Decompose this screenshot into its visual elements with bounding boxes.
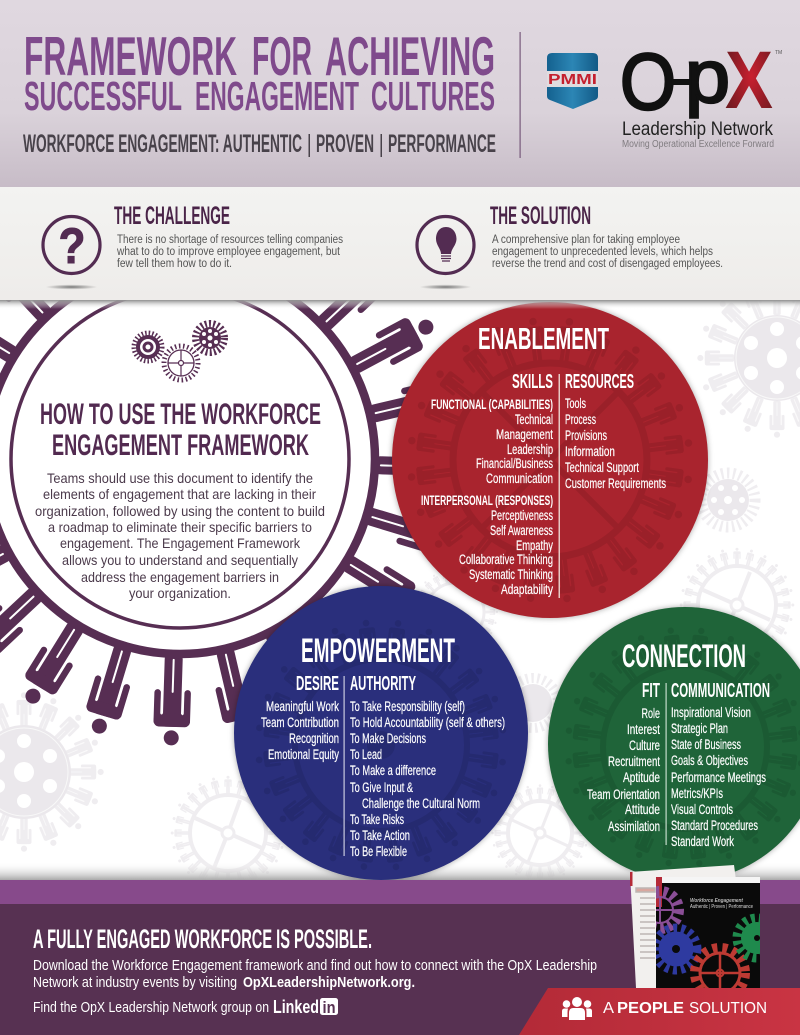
authority list: To Be Flexible: [350, 844, 407, 859]
communication list: State of Business: [671, 737, 741, 752]
panel: the challenge: [43, 202, 343, 290]
column heads: [512, 371, 634, 393]
authority list: To Make a difference: [350, 763, 436, 778]
body text: [116, 234, 343, 270]
column heads: FIT: [642, 680, 660, 702]
call to action text: Download the Workforce Engagement framework and find out how to connect with the OpX Leadership: [33, 957, 597, 974]
subtitle: PROVEN: [316, 130, 374, 158]
booklet image: [630, 865, 760, 988]
watermark gear: [256, 620, 506, 870]
column heads: [642, 680, 770, 702]
skills list: Self Awareness: [490, 523, 553, 538]
body text: engagement. The Engagement Framework: [60, 535, 301, 551]
logo: OpX: X: [725, 35, 773, 126]
green circle: [548, 607, 800, 881]
title: FRAMEWORK: [24, 25, 237, 87]
fit list: Recruitment: [608, 754, 660, 769]
logo: OpX: p: [685, 35, 730, 118]
column heads: RESOURCES: [565, 371, 634, 393]
purple stripe: [0, 880, 800, 904]
logo: OpX: Moving Operational Excellence Forward: [622, 139, 774, 150]
body text: There is no shortage of resources telling companies: [117, 234, 343, 246]
fit list: Interest: [627, 722, 660, 737]
divider: [666, 683, 667, 845]
heading: EMPOWERMENT: [301, 632, 455, 670]
authority list: To Take Risks: [350, 812, 404, 827]
heading: ENGAGEMENT FRAMEWORK: [52, 429, 309, 462]
people ring: [0, 134, 505, 784]
skills list: FUNCTIONAL (CAPABILITIES): [431, 397, 553, 412]
red circle: [392, 302, 708, 618]
body text: [492, 234, 723, 270]
icon: people: [562, 997, 592, 1020]
body text: elements of engagement that are lacking in their: [43, 486, 316, 502]
logo: OpX: [620, 35, 782, 150]
gear: wheel right: [674, 542, 800, 668]
tag text: PEOPLE: [617, 1000, 684, 1017]
title: ACHIEVING: [325, 25, 495, 87]
header divider: [520, 32, 521, 158]
call to action text: [33, 957, 597, 1016]
authority list: To Give Input &: [350, 780, 413, 795]
resources list: Provisions: [565, 428, 607, 443]
call to action text: OpXLeadershipNetwork.org.: [243, 974, 415, 991]
inner ring: [11, 290, 349, 628]
front page: [656, 877, 760, 988]
gear outer ring: [0, 264, 375, 654]
call to action heading: A FULLY ENGAGED WORKFORCE IS POSSIBLE.: [33, 924, 372, 954]
front page: Authentic | Proven | Performance: [690, 904, 753, 910]
column heads: SKILLS: [512, 371, 553, 393]
tag text: SOLUTION: [689, 1000, 767, 1017]
heading: THE SOLUTION: [490, 202, 591, 230]
skills list: Perceptiveness: [491, 508, 553, 523]
panel: enablement: [388, 302, 712, 622]
resources list: Process: [565, 412, 596, 427]
icon: LinkedIn wordmark: in: [322, 998, 336, 1017]
background gears: [0, 275, 800, 896]
call to action text: Network at industry events by visiting: [33, 974, 237, 991]
logo: PMMI shield: PMMI: [548, 71, 597, 88]
watermark gear: [566, 628, 800, 866]
gear: top right: [694, 275, 800, 441]
communication list: Visual Controls: [671, 802, 733, 817]
divider: [344, 676, 345, 856]
resources list: Information: [565, 444, 615, 459]
logo: OpX: Leadership Network: [622, 119, 773, 140]
icon: question mark: [43, 216, 100, 290]
band background: [0, 187, 800, 300]
title: CULTURES: [371, 73, 495, 119]
tag text: [603, 1000, 767, 1017]
body text: Teams should use this document to identify the: [47, 470, 313, 486]
header background: [0, 0, 800, 187]
heading: [40, 398, 321, 462]
watermark gear: [408, 318, 692, 602]
logo: OpX: O: [620, 37, 676, 126]
call to action text: Find the OpX Leadership Network group on: [33, 999, 269, 1016]
heading: THE CHALLENGE: [114, 202, 230, 230]
divider: [558, 374, 560, 598]
body text: your organization.: [129, 585, 231, 601]
skills list: Empathy: [516, 538, 553, 553]
skills list: Technical: [515, 412, 553, 427]
body text: organization, followed by using the content to build: [35, 503, 325, 519]
logo: PMMI shield: [547, 53, 598, 109]
authority list: To Take Action: [350, 828, 410, 843]
desire list: [261, 699, 339, 762]
gear: wheel bottom centre: [165, 770, 291, 896]
fit list: Culture: [629, 738, 660, 753]
title: FOR: [252, 25, 312, 87]
body text: few tell them how to do it.: [117, 258, 232, 270]
body text: a roadmap to eliminate their specific barriers to: [48, 519, 312, 535]
back page: [630, 865, 736, 988]
panel: empowerment: [225, 586, 537, 901]
communication list: Standard Work: [671, 834, 734, 849]
body text: allows you to understand and sequentially: [62, 552, 298, 568]
authority list: To Lead: [350, 747, 382, 762]
icon: light bulb: [417, 216, 474, 290]
gear: below enablement: [408, 565, 502, 659]
desire list: Team Contribution: [261, 715, 339, 730]
communication list: Goals & Objectives: [671, 753, 748, 768]
logo: OpX: TM: [775, 50, 782, 56]
resources list: Tools: [565, 396, 586, 411]
fit list: Team Orientation: [587, 787, 660, 802]
footer panel: [0, 865, 800, 1035]
skills list: Communication: [486, 471, 553, 486]
body text: engagement to unprecedented levels, which helps: [492, 246, 713, 258]
icon: three gears: [134, 324, 224, 380]
communication list: Standard Procedures: [671, 818, 758, 833]
communication list: Metrics/KPIs: [671, 786, 723, 801]
authority list: Challenge the Cultural Norm: [362, 796, 480, 811]
gear: bottom left: [0, 689, 107, 855]
fit list: Attitude: [625, 802, 660, 817]
fit list: [587, 706, 660, 834]
column heads: [296, 673, 416, 695]
footer shadow: [0, 862, 800, 880]
title: [24, 25, 495, 119]
panel: connection: [544, 604, 800, 875]
skills list: INTERPERSONAL (RESPONSES): [421, 493, 553, 508]
skills list: Collaborative Thinking: [459, 552, 553, 567]
body text: address the engagement barriers in: [81, 569, 279, 585]
column heads: DESIRE: [296, 673, 339, 695]
desire list: Meaningful Work: [266, 699, 339, 714]
subtitle: PERFORMANCE: [388, 130, 496, 158]
authority list: To Make Decisions: [350, 731, 426, 746]
communication list: [671, 705, 766, 849]
body text: A comprehensive plan for taking employee: [492, 234, 680, 246]
tag: a people solution: [519, 988, 800, 1035]
fit list: Aptitude: [623, 770, 660, 785]
panel: how to use the framework: [11, 290, 349, 628]
title: SUCCESSFUL: [24, 73, 182, 119]
dark footer background: [0, 904, 800, 1035]
desire list: Emotional Equity: [268, 747, 339, 762]
challenge and solution band: [0, 187, 800, 309]
blue circle: [234, 586, 528, 880]
header panel: [0, 0, 800, 187]
gear: small right: [701, 473, 755, 527]
fit list: Assimilation: [608, 819, 660, 834]
icon: question mark: ?: [58, 218, 86, 274]
heading: ENABLEMENT: [478, 321, 609, 356]
resources list: Customer Requirements: [565, 476, 666, 491]
communication list: Strategic Plan: [671, 721, 728, 736]
body text: reverse the trend and cost of disengaged employees.: [492, 258, 723, 270]
authority list: To Take Responsibility (self): [350, 699, 465, 714]
body text: [35, 470, 325, 601]
front page: Workforce Engagement: [690, 898, 744, 904]
icon: LinkedIn wordmark: Linked: [273, 997, 319, 1017]
authority list: [350, 699, 505, 859]
gear: small centre: [508, 678, 558, 728]
skills list: Management: [496, 427, 553, 442]
tag text: A: [603, 1000, 614, 1017]
skills list: Leadership: [507, 442, 553, 457]
authority list: To Hold Accountability (self & others): [350, 715, 505, 730]
communication list: Inspirational Vision: [671, 705, 751, 720]
skills list: Systematic Thinking: [469, 567, 553, 582]
big people gear: [0, 134, 505, 784]
subtitle: WORKFORCE ENGAGEMENT: AUTHENTIC: [23, 130, 302, 158]
skills list: [421, 397, 553, 597]
resources list: Technical Support: [565, 460, 639, 475]
column heads: AUTHORITY: [350, 673, 416, 695]
fit list: Role: [642, 706, 660, 721]
resources list: [565, 396, 666, 491]
heading: HOW TO USE THE WORKFORCE: [40, 398, 321, 431]
title: ENGAGEMENT: [195, 73, 359, 119]
gear: wheel between blue and green: [486, 779, 594, 887]
panel: the solution: [417, 202, 723, 290]
skills list: Adaptability: [501, 582, 553, 597]
body text: what to do to improve employee engagement, but: [116, 246, 341, 258]
skills list: Financial/Business: [476, 456, 553, 471]
desire list: Recognition: [289, 731, 339, 746]
band shadow: [0, 300, 800, 309]
